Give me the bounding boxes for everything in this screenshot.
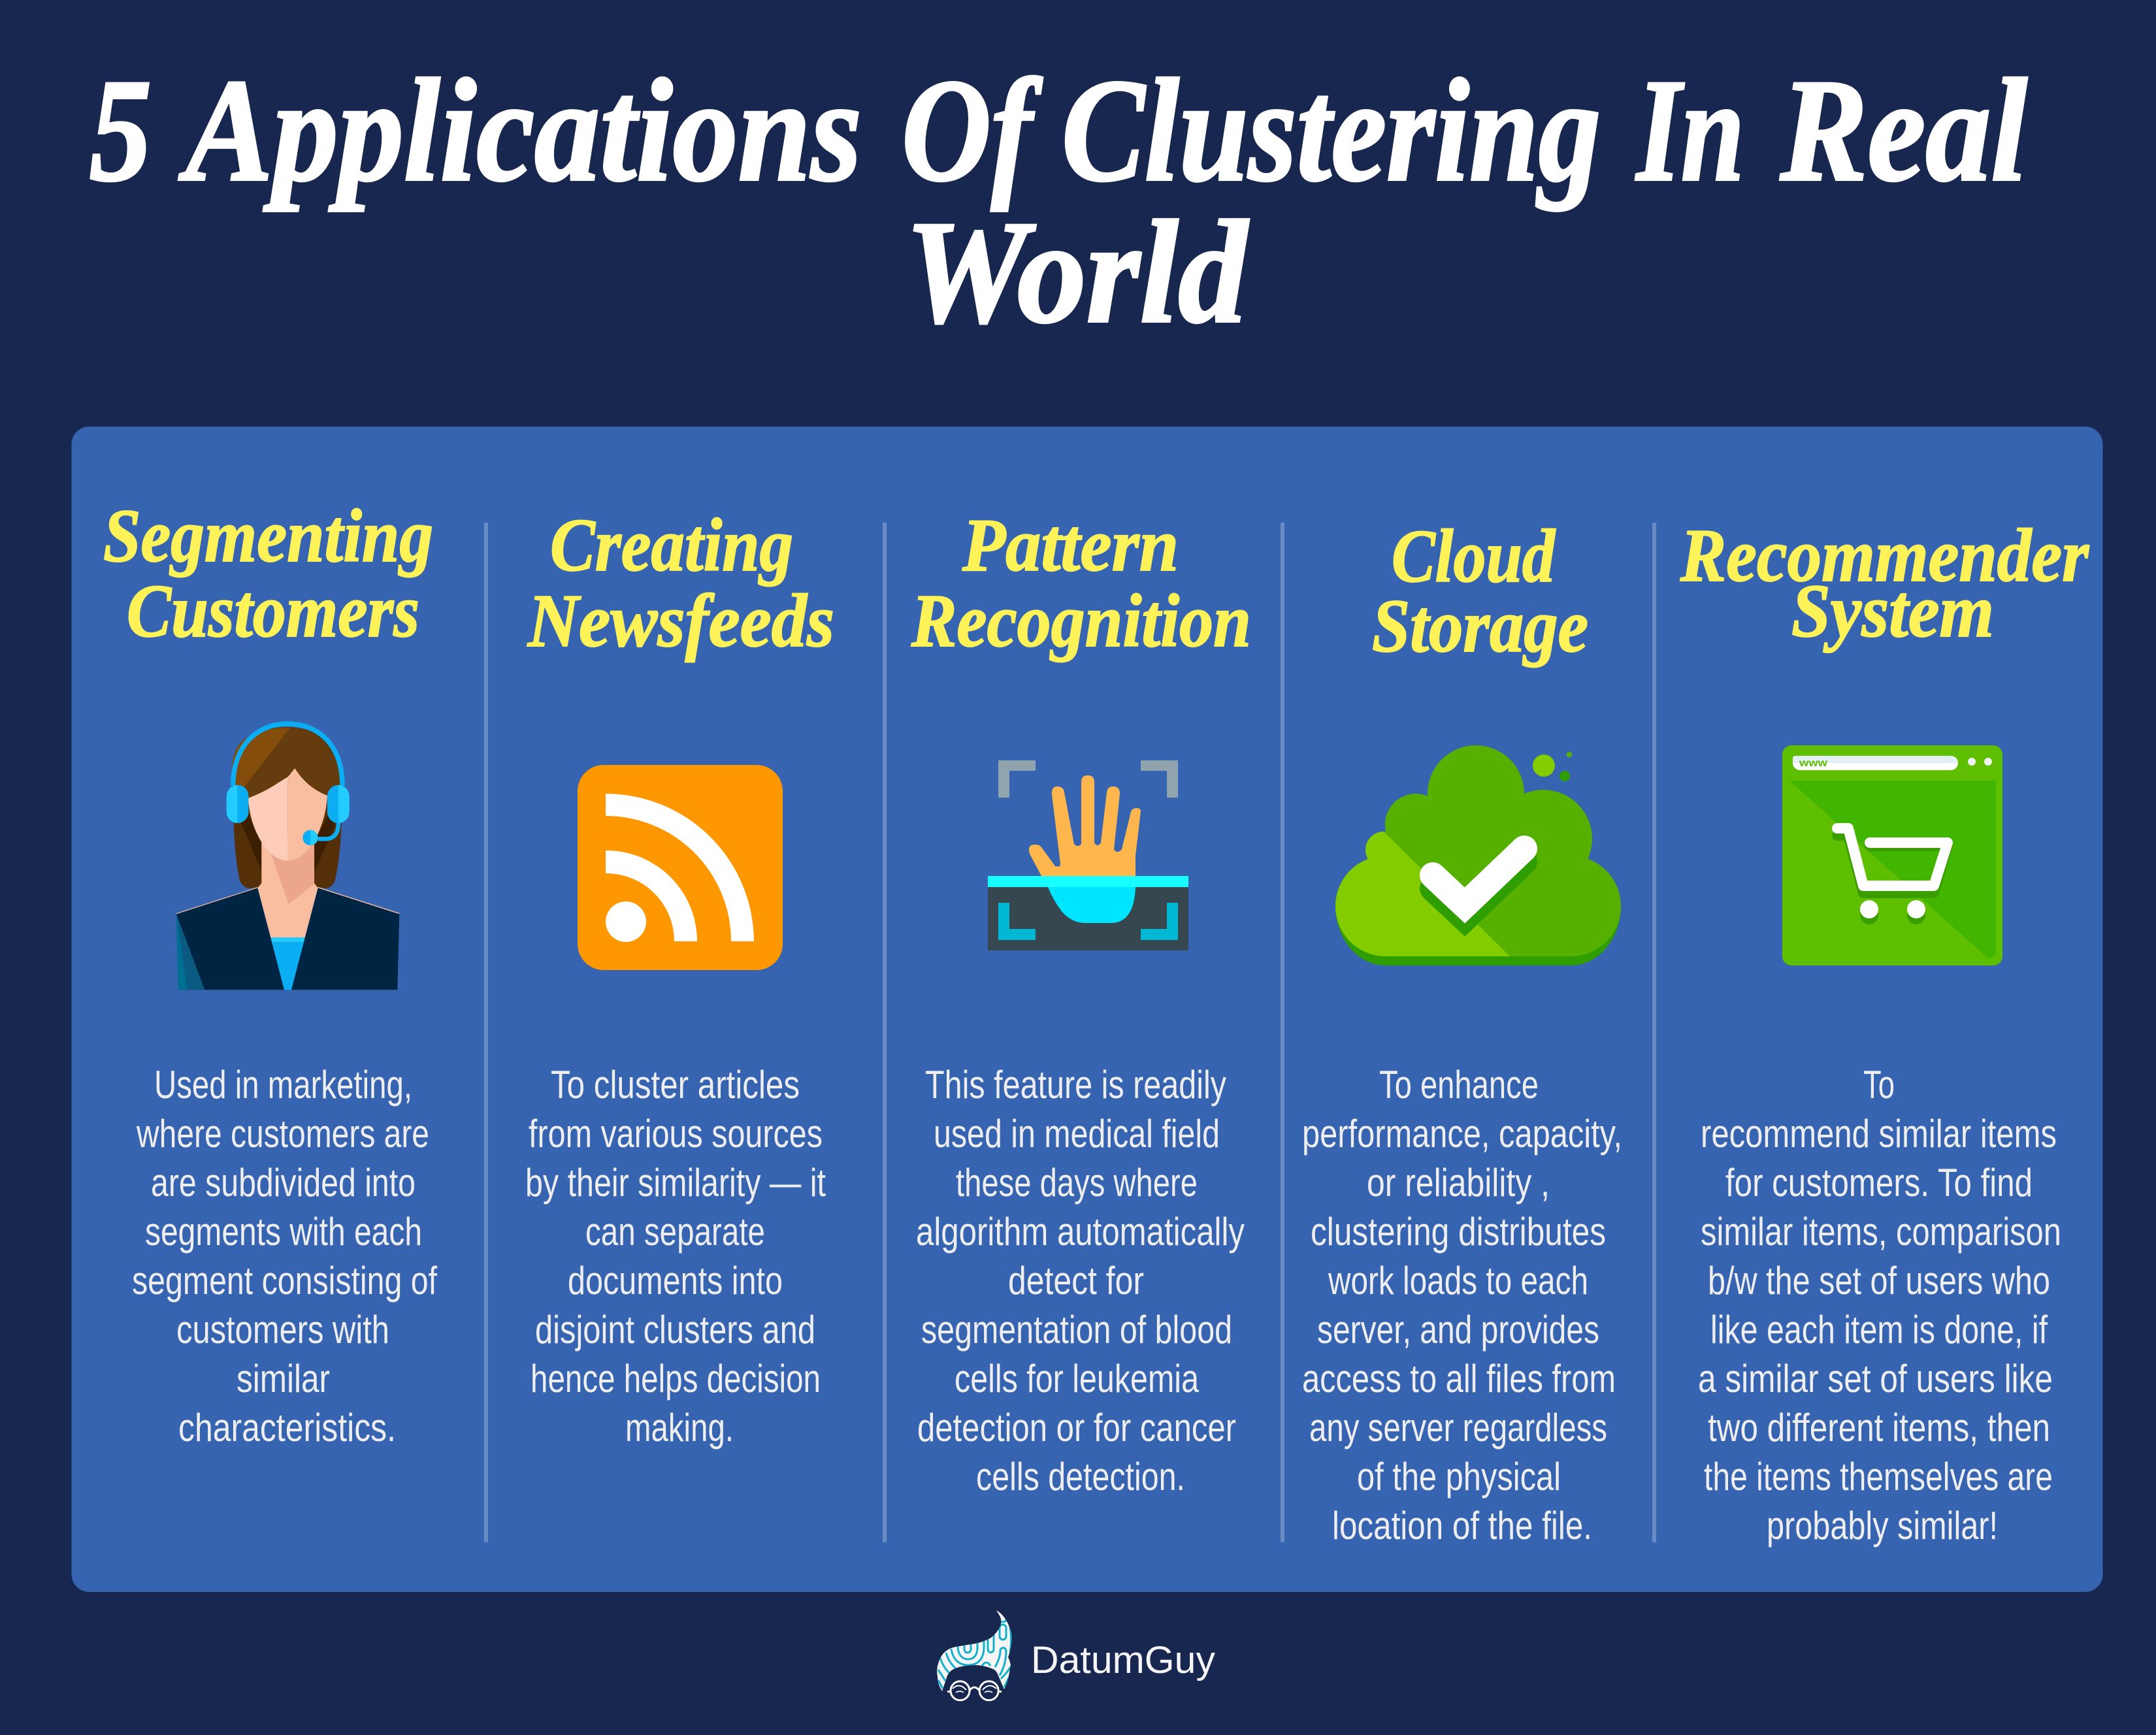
heading: Segmenting Customers: Segmenting (103, 495, 433, 577)
heading: Segmenting Customers: Customers (127, 570, 419, 653)
icon: browser with shopping cart (1782, 745, 2002, 965)
title: Applications (178, 48, 862, 212)
text: Recommender System description: like each item is done, if (1710, 1308, 2048, 1352)
text: Cloud Storage description: or reliability , (1367, 1161, 1550, 1205)
text: Creating Newsfeeds description: disjoint clusters and (535, 1308, 815, 1352)
title: World (905, 190, 1249, 353)
text: Recommender System description: b/w the set of users who (1708, 1259, 2050, 1303)
title: Of (902, 48, 1043, 212)
heading: Creating Newsfeeds: Creating (550, 504, 793, 587)
icon: RSS feed (578, 765, 783, 970)
text: Segmenting Customers description: segments with each (145, 1210, 422, 1254)
heading: Cloud Storage: Storage (1372, 585, 1588, 668)
text: Segmenting Customers description (132, 1063, 437, 1450)
icon: hand scanner (988, 760, 1188, 950)
title: In (1635, 48, 1744, 212)
text: Segmenting Customers description: are subdivided into (151, 1161, 416, 1205)
heading: Pattern Recognition: Recognition (911, 579, 1251, 662)
text: Cloud Storage description: clustering distributes (1311, 1210, 1606, 1254)
text: Recommender System description: recommend similar items (1701, 1112, 2057, 1156)
text: Cloud Storage description: performance, capacity, (1302, 1112, 1622, 1156)
heading: Cloud Storage (1372, 515, 1588, 668)
text: Creating Newsfeeds description: hence helps decision (531, 1357, 821, 1401)
icon: cloud with check mark (1335, 745, 1621, 965)
text: Pattern Recognition description: used in medical field (934, 1112, 1220, 1156)
text: Cloud Storage description (1302, 1063, 1622, 1548)
text: Recommender System description: for customers. To find (1725, 1161, 2033, 1205)
text: Recommender System description: To (1863, 1063, 1895, 1107)
text: Cloud Storage description: of the physical (1357, 1455, 1561, 1499)
text: Segmenting Customers description: Used in marketing, (154, 1063, 412, 1107)
text: Cloud Storage description: access to all files from (1302, 1357, 1616, 1401)
text: Pattern Recognition description: detect for (1008, 1259, 1144, 1303)
text: Creating Newsfeeds description: To cluster articles (551, 1063, 800, 1107)
title: 5 (90, 48, 152, 212)
text: Pattern Recognition description: This feature is readily (925, 1063, 1226, 1107)
icon: customer service agent (176, 724, 399, 990)
text: Recommender System description: two different items, then (1708, 1406, 2050, 1450)
text: Cloud Storage description: location of the file. (1332, 1504, 1592, 1548)
text: Pattern Recognition description: these days where (956, 1161, 1198, 1205)
text: Creating Newsfeeds description: by their similarity — it (525, 1161, 826, 1205)
title: Clustering (1062, 48, 1601, 212)
text: Cloud Storage description: any server regardless (1309, 1406, 1607, 1450)
text: Creating Newsfeeds description: making. (625, 1406, 734, 1450)
heading: Segmenting Customers (103, 495, 433, 653)
text: Segmenting Customers description: characteristics. (178, 1406, 396, 1450)
heading: Recommender System: System (1791, 570, 1994, 653)
text: Creating Newsfeeds description (525, 1063, 826, 1450)
text: Cloud Storage description: server, and provides (1317, 1308, 1599, 1352)
heading: Creating Newsfeeds: Newsfeeds (527, 579, 834, 662)
text: Recommender System description: a similar set of users like (1698, 1357, 2053, 1401)
text: Segmenting Customers description: segment consisting of (132, 1259, 437, 1303)
panel: applications (72, 427, 2102, 1592)
title: Real (1780, 48, 2027, 212)
text: Pattern Recognition description: cells for leukemia (955, 1357, 1200, 1401)
text: Creating Newsfeeds description: from various sources (529, 1112, 823, 1156)
heading: Cloud Storage: Cloud (1392, 515, 1556, 598)
text: Creating Newsfeeds description: documents into (568, 1259, 783, 1303)
text: Recommender System description (1698, 1063, 2061, 1548)
text: Cloud Storage description: To enhance (1379, 1063, 1539, 1107)
text: Pattern Recognition description: segmentation of blood (921, 1308, 1232, 1352)
text: Pattern Recognition description (916, 1063, 1245, 1499)
title (90, 48, 2027, 353)
text: Pattern Recognition description: detection or for cancer (917, 1406, 1236, 1450)
text: Segmenting Customers description: similar (237, 1357, 330, 1401)
logo: DatumGuy: DatumGuy (1031, 1639, 1215, 1681)
text: Pattern Recognition description: algorithm automatically (916, 1210, 1245, 1254)
text: Creating Newsfeeds description: can separate (585, 1210, 765, 1254)
heading: Recommender System (1680, 514, 2089, 653)
logo: DatumGuy (937, 1610, 1215, 1700)
heading: Recommender System: Recommender (1680, 514, 2089, 597)
heading: Pattern Recognition (911, 504, 1251, 662)
text: Segmenting Customers description: customers with (176, 1308, 389, 1352)
text: Segmenting Customers description: where customers are (136, 1112, 429, 1156)
text: Recommender System description: probably similar! (1767, 1504, 1998, 1548)
text: Recommender System description: the items themselves are (1704, 1455, 2053, 1499)
text: Cloud Storage description: work loads to each (1328, 1259, 1588, 1303)
text: Pattern Recognition description: cells detection. (976, 1455, 1185, 1499)
heading: Creating Newsfeeds (527, 504, 834, 662)
heading: Pattern Recognition: Pattern (962, 504, 1179, 587)
text: Recommender System description: similar items, comparison (1701, 1210, 2061, 1254)
icon: browser with shopping cart: www (1799, 758, 1828, 769)
